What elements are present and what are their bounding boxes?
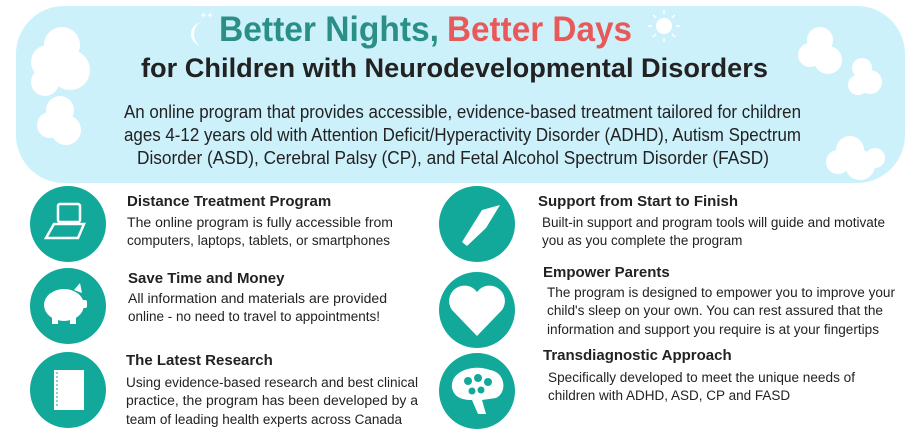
feature: distance treatment: computers, laptops, tablets, or smartphones <box>127 233 390 248</box>
feature: empower: Empower Parents <box>543 264 670 281</box>
text block: intro: Disorder (ASD), Cerebral Palsy (CP), and Fetal Alcohol Spectrum Disorder (FASD) <box>137 148 769 168</box>
feature: distance treatment: Distance Treatment Program <box>127 193 331 210</box>
icon: cloud right top <box>798 27 882 95</box>
feature: research <box>126 352 419 427</box>
feature: distance treatment <box>127 193 393 248</box>
feature: support <box>538 193 885 248</box>
title: Better Nights, <box>219 10 439 49</box>
icon: laptop <box>30 186 106 262</box>
title: Better Days <box>447 10 632 49</box>
feature: transdiagnostic <box>543 347 855 403</box>
icon: moon and stars <box>191 11 214 46</box>
feature: research: The Latest Research <box>126 352 273 369</box>
feature: empower: The program is designed to empower you to improve your <box>547 285 896 300</box>
feature: support: Support from Start to Finish <box>538 193 738 210</box>
feature: research: Using evidence-based research and best clinical <box>126 375 418 390</box>
feature: save time: All information and materials are provided <box>128 291 387 306</box>
text block: intro <box>124 102 801 168</box>
feature: save time <box>128 270 387 324</box>
feature: distance treatment: The online program is fully accessible from <box>127 215 393 230</box>
panel: header background <box>16 6 905 183</box>
feature: research: practice, the program has been developed by a <box>126 393 419 408</box>
feature: transdiagnostic: Specifically developed to meet the unique needs of <box>548 370 855 385</box>
subtitle: for Children with Neurodevelopmental Disorders <box>141 53 768 83</box>
feature: transdiagnostic: children with ADHD, ASD, CP and FASD <box>548 388 790 403</box>
feature: research: team of leading health experts across Canada <box>126 412 402 427</box>
feature: empower <box>543 264 896 337</box>
icon: sun <box>648 10 680 42</box>
feature: support: Built-in support and program tools will guide and motivate <box>542 215 885 230</box>
title <box>219 10 632 49</box>
feature: transdiagnostic: Transdiagnostic Approach <box>543 347 732 364</box>
icon: piggy bank <box>30 268 106 344</box>
icon: cloud left top <box>31 27 90 96</box>
icon: notebook <box>30 352 106 428</box>
text block: intro: An online program that provides accessible, evidence-based treatment tailored for children <box>124 102 801 122</box>
feature: save time: online - no need to travel to appointments! <box>128 309 380 324</box>
icon: moon and stars: ✦✦ <box>200 11 214 20</box>
feature: save time: Save Time and Money <box>128 270 285 287</box>
icon: heart <box>439 272 515 348</box>
feature: empower: information and support you require is at your fingertips <box>547 322 879 337</box>
icon: brain with gears <box>439 353 515 429</box>
feature: support: you as you complete the program <box>542 233 742 248</box>
feature: empower: child's sleep on your own. You can rest assured that the <box>547 303 883 318</box>
icon: helping hands <box>439 186 515 262</box>
icon: cloud right bottom <box>826 136 885 180</box>
text block: intro: ages 4-12 years old with Attention Deficit/Hyperactivity Disorder (ADHD), Autism Spectrum <box>124 125 801 145</box>
icon: cloud left middle <box>37 96 81 145</box>
